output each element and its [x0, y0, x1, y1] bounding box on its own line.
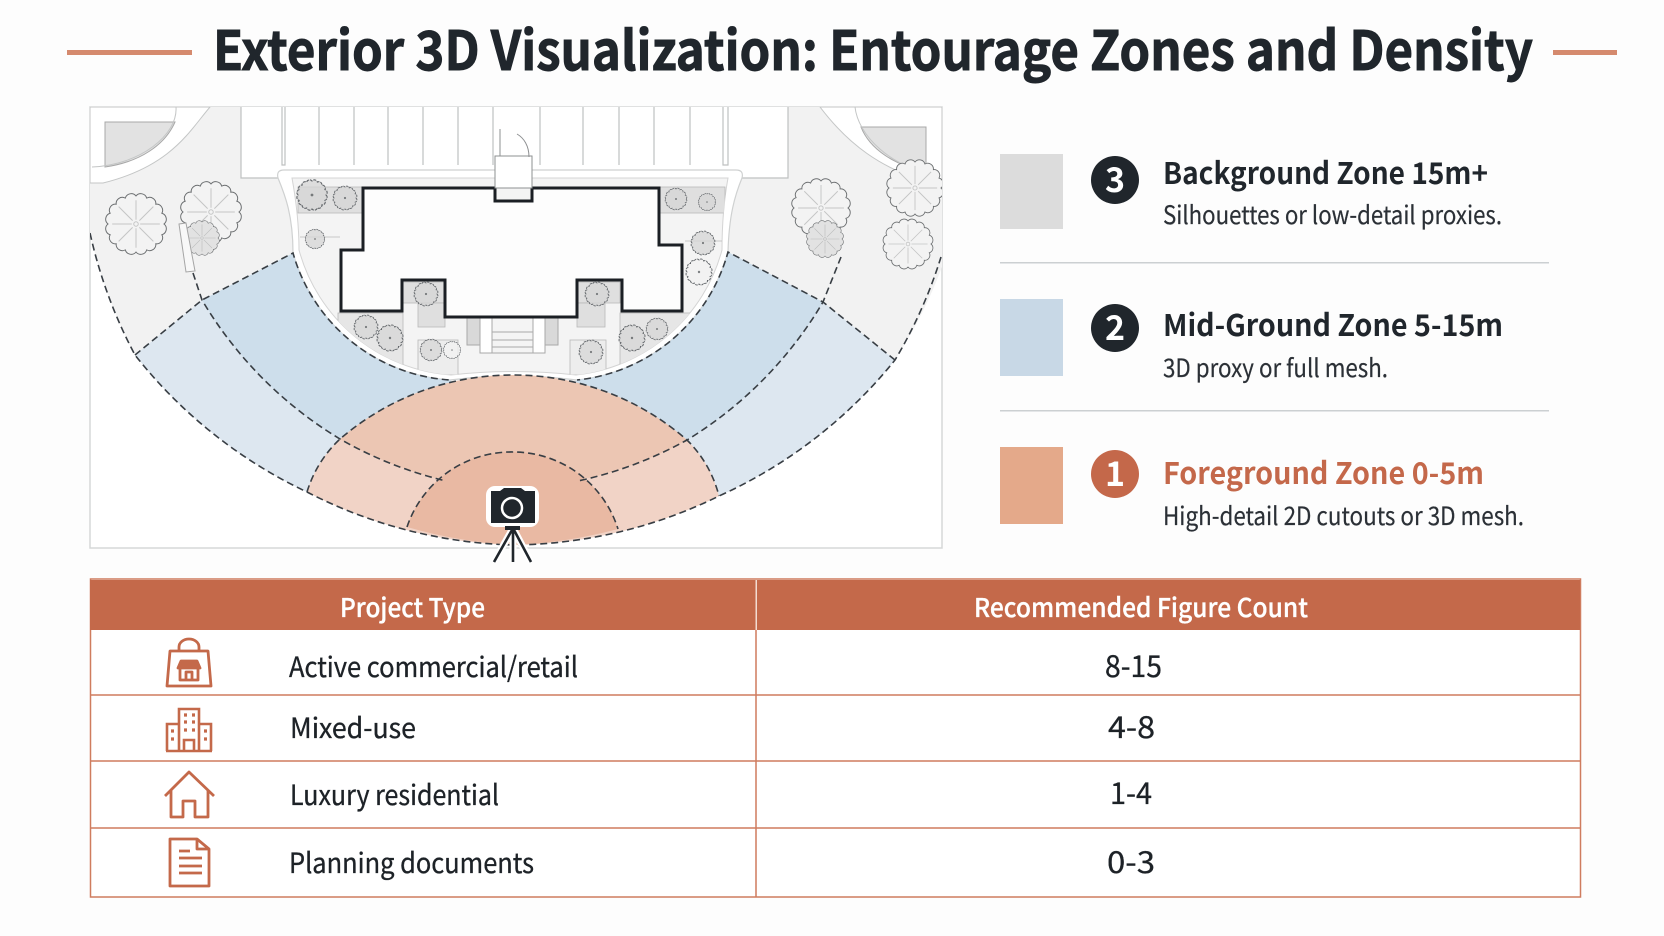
- panel: site plan with entourage zones: [90, 107, 943, 562]
- row: luxury residential: Luxury residential: [290, 774, 499, 814]
- row: mixed-use: 4-8: [1108, 703, 1155, 747]
- bench: [179, 223, 195, 272]
- mid-ground zone left outer: [136, 300, 339, 492]
- mid-ground zone right outer: [688, 304, 894, 496]
- row: mixed-use: Mixed-use: [290, 707, 416, 747]
- foreground zone inner band: [407, 452, 618, 545]
- legend: background zone: [1000, 149, 1502, 232]
- row: luxury residential: 1-4: [1110, 769, 1152, 813]
- planting beds: [298, 187, 725, 375]
- table body: [90, 579, 1580, 897]
- building footprint: [341, 188, 682, 317]
- panel: figure count table: [90, 579, 1581, 897]
- legend: mid-ground zone: 3D proxy or full mesh.: [1163, 349, 1388, 385]
- background zone ground: [90, 107, 942, 382]
- row: active commercial/retail: 8-15: [1105, 642, 1162, 686]
- legend: mid-ground zone: 2: [1105, 301, 1125, 350]
- panel: zone legend: [1000, 149, 1549, 533]
- row: mixed-use: [166, 703, 1155, 751]
- courtyard patio: [278, 170, 742, 380]
- icon: house: [165, 772, 214, 817]
- site drawing: [90, 107, 943, 545]
- map frame: [90, 107, 942, 548]
- zone dashed boundaries: [90, 233, 941, 545]
- row: luxury residential: [165, 769, 1152, 817]
- parking bays: [241, 107, 788, 178]
- mid-ground zone left inner: [202, 254, 452, 438]
- table header: Recommended Figure Count: [974, 588, 1308, 625]
- large site trees: [106, 160, 943, 269]
- icon: city buildings: [166, 709, 212, 751]
- row: active commercial/retail: Active commercial/retail: [289, 646, 578, 686]
- legend: background zone: Silhouettes or low-detail proxies.: [1163, 196, 1502, 232]
- legend: background zone: 3: [1105, 153, 1125, 202]
- table header: [90, 580, 1580, 630]
- row: planning documents: [170, 838, 1155, 886]
- legend: mid-ground zone: [1000, 299, 1503, 385]
- courtyard trees: [297, 180, 716, 364]
- legend: background zone: Background Zone 15m+: [1163, 149, 1488, 193]
- entry porch and door: [495, 129, 532, 188]
- title: Exterior 3D Visualization: Entourage Zones and Density: [213, 7, 1533, 86]
- legend: mid-ground zone: Mid-Ground Zone 5-15m: [1163, 301, 1503, 345]
- table header: Project Type: [340, 588, 485, 625]
- foreground zone middle band: [340, 375, 687, 478]
- foreground zone outer band: [307, 375, 719, 545]
- legend: foreground zone: [1000, 447, 1524, 533]
- icon: document: [170, 839, 209, 886]
- legend: foreground zone: 1: [1105, 447, 1125, 496]
- top-right street corner: [820, 107, 942, 185]
- icon: shopping bag store: [167, 639, 211, 686]
- row: planning documents: 0-3: [1107, 838, 1155, 882]
- row: active commercial/retail: [167, 639, 1162, 686]
- row: planning documents: Planning documents: [289, 842, 534, 882]
- mid-ground zone right inner: [576, 253, 822, 439]
- icon: camera on tripod: [486, 486, 539, 562]
- top-left street corner: [90, 107, 210, 183]
- entrance steps: [467, 318, 558, 353]
- legend: foreground zone: Foreground Zone 0-5m: [1163, 449, 1484, 493]
- legend: foreground zone: High-detail 2D cutouts or 3D mesh.: [1163, 497, 1524, 533]
